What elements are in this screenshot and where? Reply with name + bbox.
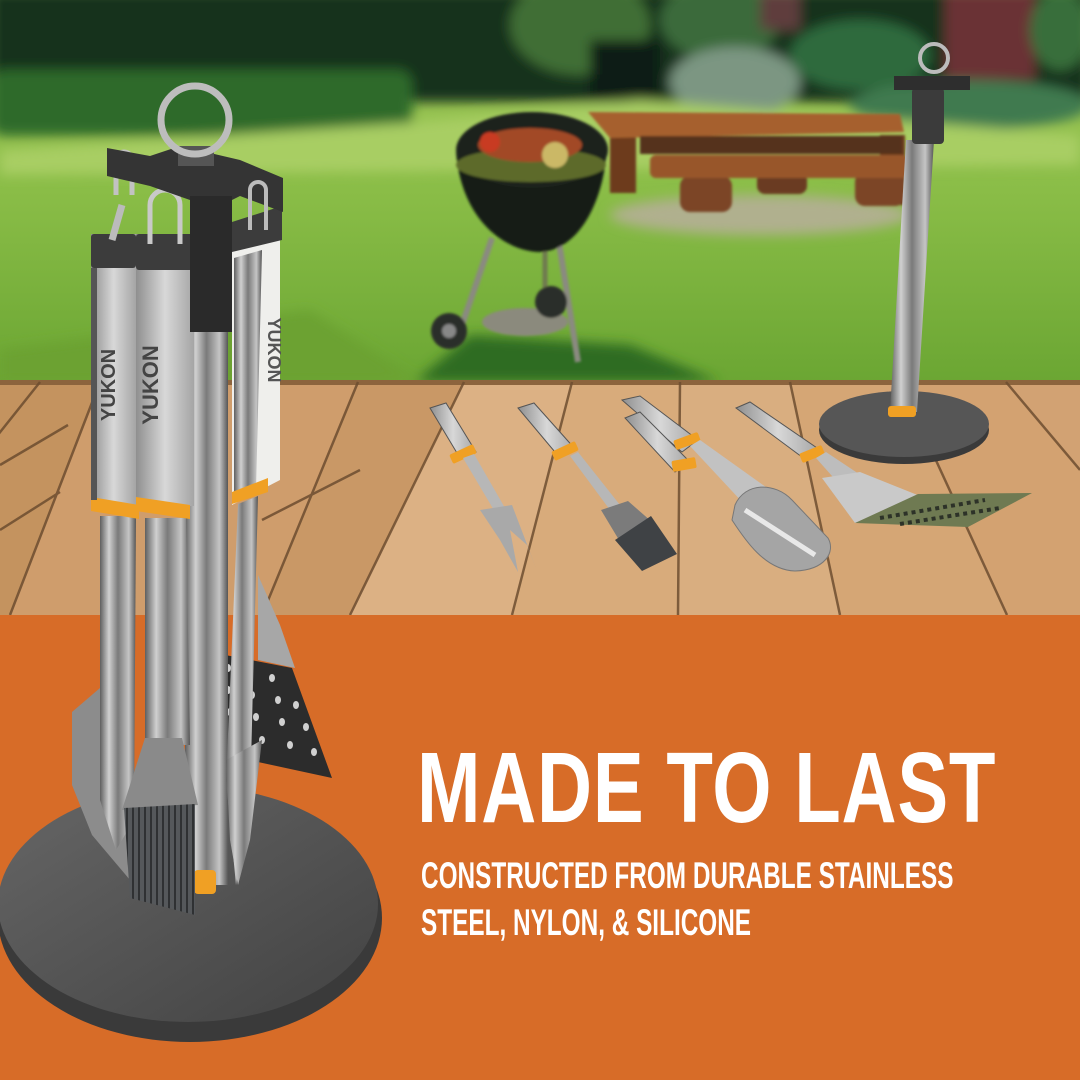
- background picnic table: [588, 112, 908, 212]
- subtitle: STEEL, NYLON, & SILICONE: [421, 902, 751, 943]
- orange panel: [0, 615, 1080, 1080]
- spatula: [736, 402, 1032, 527]
- background grill: [431, 112, 608, 362]
- title: MADE TO LAST: [417, 732, 996, 844]
- hanging spatula: [220, 575, 332, 778]
- subtitle: CONSTRUCTED FROM DURABLE STAINLESS: [421, 855, 953, 896]
- right rear handle: YUKON: [264, 317, 284, 383]
- centre handle brand: YUKON: [138, 345, 163, 425]
- fork tines: [226, 740, 262, 885]
- tongs: [622, 396, 831, 571]
- central pole: [185, 330, 228, 894]
- lawn background: [0, 0, 1080, 382]
- centre handle with brush: [122, 190, 198, 915]
- standing stand on deck: [819, 44, 989, 464]
- fork: [430, 403, 536, 572]
- left handle brand: YUKON: [98, 349, 120, 421]
- wood deck: [0, 380, 1080, 616]
- subtitle: [421, 855, 953, 943]
- stand hub and ring: [107, 86, 283, 332]
- left handle with tongs: [72, 152, 139, 880]
- brush: [518, 403, 677, 571]
- large stand base: [0, 786, 382, 1042]
- right rear handle: [226, 206, 284, 885]
